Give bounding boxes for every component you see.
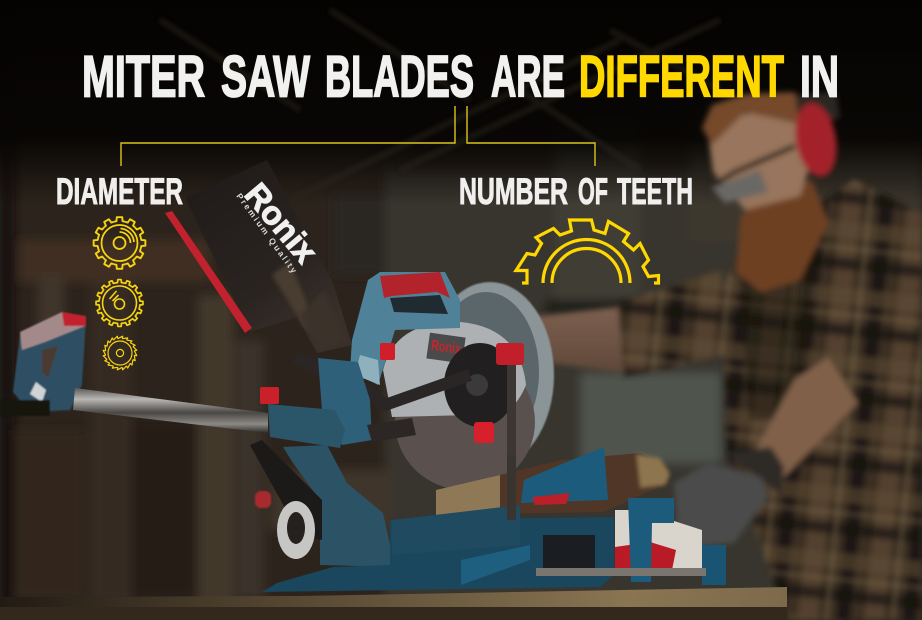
title: IN [800,44,839,110]
title: MITER [82,44,205,110]
red knob lower [474,422,494,443]
blue clamp [536,498,726,585]
title: DIFFERENT [579,44,784,110]
icon: medium blade [96,280,143,326]
blade guard clear [426,282,554,468]
blue base [262,505,614,592]
ear muff [790,100,842,180]
saw blade [395,354,535,490]
red strip [165,211,252,333]
chrome tube [73,388,268,433]
beard [736,180,828,292]
man in plaid shirt [533,92,922,620]
label: number of teeth: NUMBER [459,171,568,212]
icon: small blade [103,336,137,370]
logo badge [426,333,466,363]
dark flange [444,343,516,427]
face [706,108,808,210]
bag logo: Ronix [238,176,326,270]
label: number of teeth [459,171,693,212]
threaded rod [507,365,516,520]
label: number of teeth: OF [578,171,608,212]
icon: half gear teeth [516,220,658,283]
title [82,44,839,110]
upper arm [754,357,858,480]
motor parts [318,358,372,445]
red knob rear [260,387,279,404]
sleeve left [618,270,735,377]
red knob top [496,343,524,365]
left handle [0,312,86,416]
title: SAW [221,44,310,110]
icon: large blade [94,217,145,269]
black grip [367,418,416,442]
torso shirt [721,180,922,620]
title: ARE [491,44,565,110]
miter saw [0,160,726,592]
blue fence [521,447,608,505]
glove [674,463,768,547]
silver cover [383,322,526,417]
blue collar and arm [268,404,395,567]
hair [702,92,800,145]
dust bag [165,160,352,353]
title: BLADES [325,44,474,110]
white plate [615,510,702,575]
rod lower [507,455,516,520]
lower strut and wheel [250,440,322,559]
forearm [533,307,624,373]
strap arm [295,358,470,405]
shirt shading [740,260,815,420]
workbench [0,587,787,620]
safety glasses [712,146,795,186]
label: number of teeth: TEETH [617,171,693,212]
red knob small [380,343,395,360]
red parts [615,542,676,572]
connector lines [121,106,595,166]
logo badge: Ronix [430,337,463,358]
wood workpiece [436,453,670,515]
watch [728,447,784,495]
ear muff band [795,92,840,128]
right sleeve [794,317,922,430]
dust bag: Premium Quality [234,191,299,275]
label: diameter: DIAMETER [56,171,183,212]
saw top handle [350,272,460,385]
